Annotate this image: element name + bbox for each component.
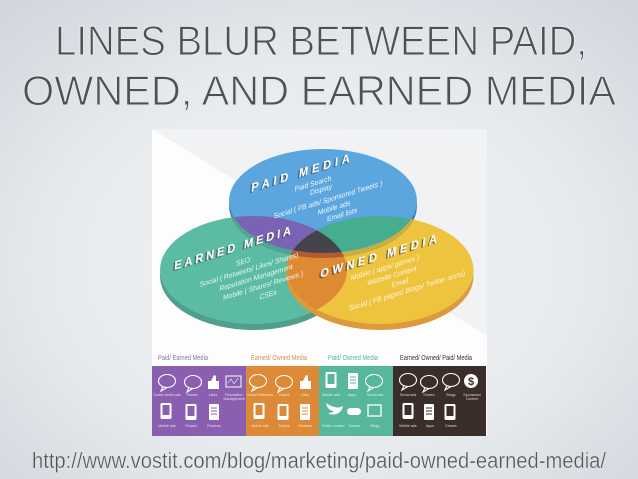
text: earned media list: Reputation Management <box>219 263 293 293</box>
card: paid/earned <box>152 366 246 436</box>
icon: monitor <box>368 405 381 416</box>
overlap: paid and earned <box>234 216 341 253</box>
card: paid/earned: Social media ads <box>153 393 181 397</box>
card: earned/owned <box>246 366 319 436</box>
card: paid/owned: Mobile ads <box>322 393 340 397</box>
text: owned media list: Email <box>392 276 409 290</box>
card: paid/earned: Mobile ads <box>158 424 176 428</box>
card: all four: Apps <box>426 424 434 428</box>
overlap: all three <box>293 230 342 253</box>
card: all four: Content <box>466 397 478 401</box>
legend heading: all four: Earned/ Owned/ Paid/ Media <box>400 355 472 362</box>
card: paid/owned <box>319 366 393 436</box>
text: earned media list: SEO <box>236 256 251 268</box>
title: OWNED, AND EARNED MEDIA <box>22 67 616 114</box>
card: earned/owned: Social Retweets <box>247 393 273 397</box>
circle: earned media <box>160 216 347 330</box>
circle: paid media <box>229 149 417 253</box>
icon: dollar bubble: $ <box>468 376 474 388</box>
overlap: earned and owned <box>286 254 347 310</box>
card: earned/owned: Shares <box>278 393 290 397</box>
legend heading: paid/earned: Paid/ Earned Media <box>158 355 208 362</box>
venn diagram panel <box>152 129 487 436</box>
card: paid/owned: Social ads <box>367 393 383 397</box>
text: paid media list: Paid Search <box>295 174 331 194</box>
text: earned media list: CSEs <box>259 288 277 302</box>
card: paid/earned: Reputation <box>225 393 243 397</box>
card: paid/earned: Likes <box>209 393 217 397</box>
card: all four <box>393 366 486 436</box>
card: all four: Blogs <box>446 393 456 397</box>
card: all four: Mobile ads <box>399 424 417 428</box>
text: owned media list: Website Content <box>367 264 417 288</box>
text: paid media list: Email lists <box>327 206 358 224</box>
text: owned media list: Mobile ( apps/ games ) <box>351 253 419 282</box>
card: paid/earned: Shares <box>186 393 198 397</box>
overlap: paid and owned <box>293 216 411 253</box>
text: owned media list: Social ( FB pages/ Blogs/ Twitter accts) <box>349 269 465 313</box>
card: paid/earned: Management <box>224 397 244 401</box>
card: earned/owned: Reviews <box>298 424 312 428</box>
icon: twitter bird <box>326 403 343 415</box>
title: LINES BLUR BETWEEN PAID, <box>55 17 587 64</box>
heading: owned media: OWNED MEDIA <box>320 231 438 281</box>
legend panel <box>152 345 487 436</box>
depth of paid circle <box>229 202 417 258</box>
circle: owned media <box>286 216 474 330</box>
text: earned media list: Social ( Retweets/ Likes/ Shares) <box>200 251 298 289</box>
title <box>22 17 616 114</box>
card: earned/owned: Shares <box>278 424 290 428</box>
card: all four: Social ads <box>400 393 416 397</box>
card: paid/earned: Reviews <box>207 424 221 428</box>
icon: game controller <box>347 408 361 415</box>
text: earned media list: Mobile ( Shares/ Reviews ) <box>223 270 303 302</box>
text: paid media list: Mobile ads <box>318 199 351 217</box>
heading: paid media: PAID MEDIA <box>251 150 351 195</box>
legend heading: paid/owned: Paid/ Owned Media <box>328 355 378 362</box>
card: all four: Shares <box>445 424 457 428</box>
card: paid/owned: Apps <box>348 393 356 397</box>
icon: thumbs up <box>208 375 219 389</box>
card: earned/owned: Mobile ads <box>251 424 269 428</box>
text: paid media list: Social ( FB ads/ Sponsored Tweets ) <box>274 179 382 221</box>
card: paid/owned: Twitter content <box>321 424 345 428</box>
text: paid media list: Display <box>310 182 332 197</box>
card: all four: Sponsored <box>463 393 481 397</box>
card: paid/earned: Shares <box>185 424 197 428</box>
card: all four: Shares <box>423 393 435 397</box>
heading: earned media: EARNED MEDIA <box>174 223 292 273</box>
legend heading: earned/owned: Earned/ Owned Media <box>251 355 307 362</box>
card: earned/owned: Likes <box>301 393 309 397</box>
icon: reputation chart <box>226 376 241 387</box>
card: paid/owned: Blogs <box>370 424 380 428</box>
card: paid/owned: Games <box>348 424 360 428</box>
